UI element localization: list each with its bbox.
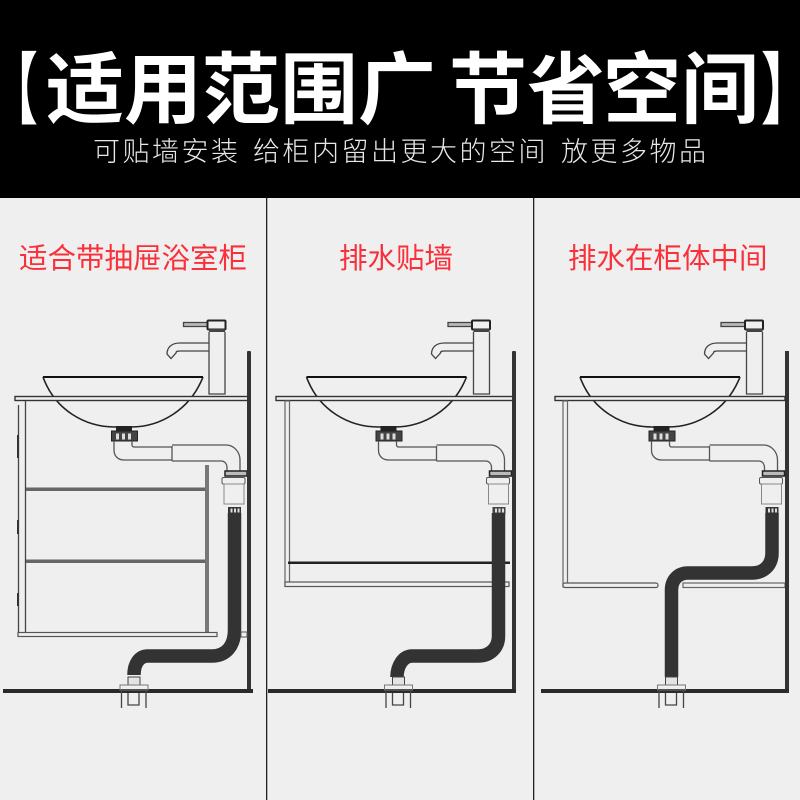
wall and floor xyxy=(541,351,789,693)
countertop xyxy=(15,396,248,400)
icon: basin xyxy=(43,377,203,427)
wall and floor xyxy=(3,351,253,693)
cabinet frame xyxy=(17,401,217,636)
icon: faucet xyxy=(432,320,490,394)
floor drain xyxy=(120,677,148,708)
countertop xyxy=(276,396,513,400)
wall and floor xyxy=(268,351,516,693)
panel: mid-cabinet drain diagram xyxy=(541,320,789,708)
panel: drawer cabinet diagram xyxy=(3,320,253,708)
panel: wall-mounted drain diagram xyxy=(268,320,516,708)
icon: faucet xyxy=(167,320,226,394)
flexible hose xyxy=(397,513,498,677)
panel heading: drawers: 适合带抽屉浴室柜 xyxy=(19,243,247,275)
icon: faucet xyxy=(704,320,763,394)
panel heading: against wall: 排水贴墙 xyxy=(339,243,453,275)
title: 适用范围广节省空间 xyxy=(46,46,759,134)
countertop xyxy=(555,396,785,400)
icon: basin xyxy=(306,377,466,427)
flexible hose xyxy=(134,513,234,675)
floor drain xyxy=(384,677,412,708)
subtitle: 可贴墙安装给柜内留出更大的空间放更多物品 xyxy=(93,137,706,167)
drain pipe xyxy=(649,426,784,514)
drain pipe xyxy=(112,426,247,514)
drawer dividers xyxy=(26,488,205,563)
icon: basin xyxy=(580,377,740,427)
panel heading: middle: 排水在柜体中间 xyxy=(568,243,768,275)
floor drain xyxy=(658,677,686,708)
drain pipe xyxy=(376,426,512,514)
cabinet frame xyxy=(563,401,785,588)
flexible hose xyxy=(672,513,772,677)
cabinet frame xyxy=(285,401,510,586)
